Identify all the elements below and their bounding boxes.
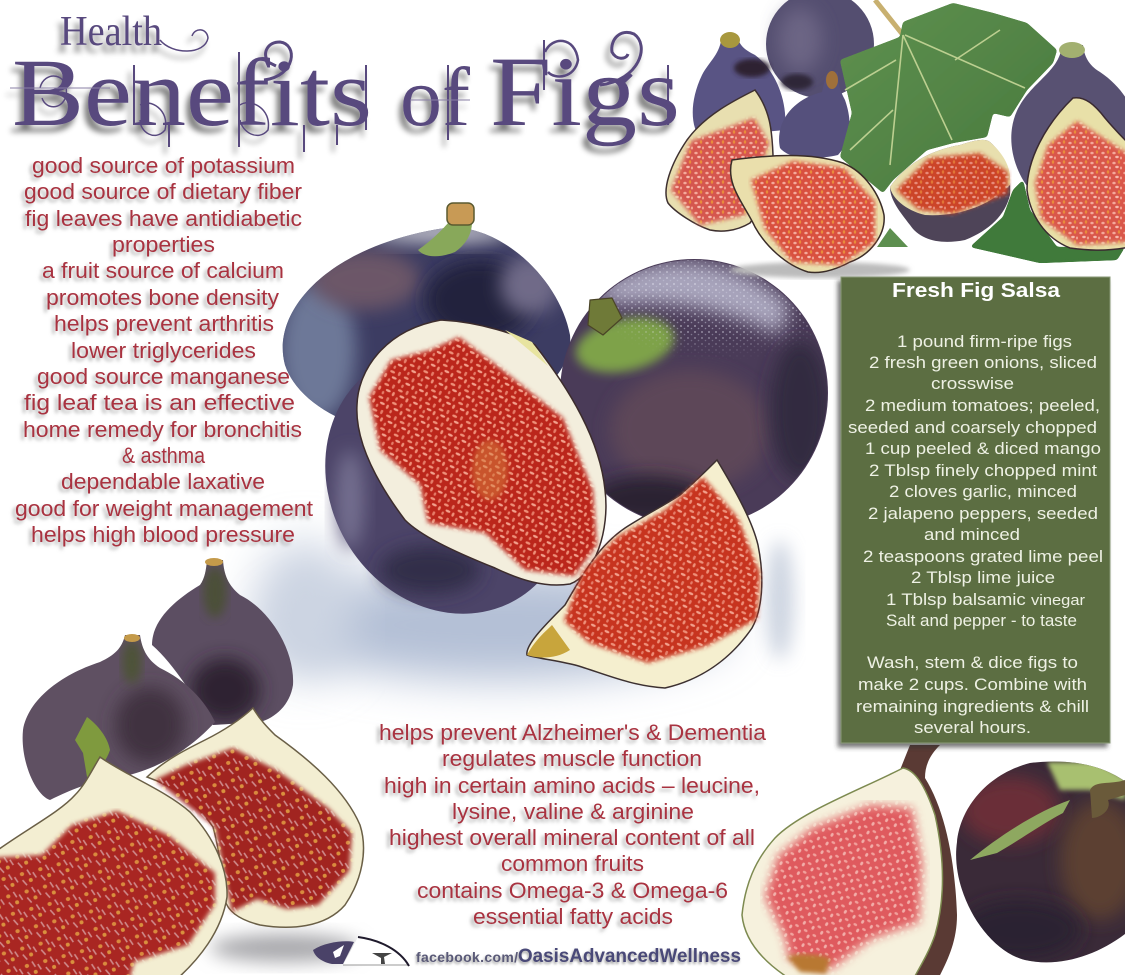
recipe ingredients: and minced <box>924 525 1020 544</box>
benefits list: left column: good source of dietary fiber <box>24 179 302 204</box>
benefits list: left column: lower triglycerides <box>71 338 256 363</box>
recipe ingredients: Salt and pepper - to taste <box>886 611 1077 630</box>
recipe ingredients: 2 teaspoons grated lime peel <box>863 547 1103 566</box>
benefits list: left column: dependable laxative <box>61 469 265 494</box>
bottom right figs group <box>742 745 1125 975</box>
fig: whole, far left <box>693 32 785 138</box>
benefits list: left column: properties <box>112 232 215 257</box>
title word: Figs: Figs <box>490 36 680 147</box>
benefits list: bottom centre: regulates muscle function <box>442 746 702 771</box>
fig: cut right <box>147 708 364 927</box>
facebook address: facebook.com/ <box>416 949 518 965</box>
recipe directions: Wash, stem & dice figs to <box>867 653 1078 672</box>
leaf: large <box>840 0 1057 193</box>
fig: whole right <box>956 761 1125 962</box>
benefits list: left column: good for weight management <box>15 496 313 521</box>
fig: cut centre <box>731 156 884 273</box>
benefits list: left column: good source of potassium <box>32 153 295 178</box>
benefits list: left column: fig leaves have antidiabetic <box>25 206 302 231</box>
recipe ingredients: 2 Tblsp finely chopped mint <box>869 461 1097 480</box>
title swashes <box>10 30 668 152</box>
shadow under main figs <box>255 540 794 680</box>
logo and facebook link <box>313 937 741 967</box>
panel: Fresh Fig Salsa recipe <box>841 277 1110 743</box>
recipe directions: several hours. <box>914 718 1031 737</box>
recipe ingredients: 1 Tblsp balsamic vinegar <box>886 590 1085 609</box>
benefits list: left column: helps prevent arthritis <box>54 311 274 336</box>
icon: Oasis logo <box>313 937 409 966</box>
recipe ingredients: seeded and coarsely chopped <box>848 418 1097 437</box>
recipe ingredients: 1 pound firm-ripe figs <box>897 332 1072 351</box>
shadow below top figs <box>730 262 910 278</box>
facebook address: OasisAdvancedWellness <box>518 946 741 967</box>
benefits list: bottom centre: essential fatty acids <box>473 904 673 929</box>
stem knob <box>1090 780 1125 818</box>
fig: whole back <box>152 558 293 725</box>
fig: cut left <box>0 717 227 975</box>
recipe ingredients: 2 cloves garlic, minced <box>889 482 1077 501</box>
benefits list: bottom centre: lysine, valine & arginine <box>452 799 694 824</box>
recipe ingredients <box>848 332 1103 630</box>
benefits list: bottom centre: high in certain amino acids – leucine, <box>384 773 760 798</box>
recipe ingredients: 2 Tblsp lime juice <box>911 568 1055 587</box>
recipe ingredients: 2 jalapeno peppers, seeded <box>868 504 1098 523</box>
recipe box <box>841 277 1110 743</box>
top right figs group <box>665 0 1125 278</box>
fig: cut small <box>890 140 1012 242</box>
stem <box>75 717 110 777</box>
recipe heading: Fresh Fig Salsa <box>892 280 1061 302</box>
leaf: lower right <box>970 180 1125 263</box>
title word: Benefits: Benefits <box>12 39 372 146</box>
bottom left figs group <box>0 558 364 975</box>
benefits list: left column: fig leaf tea is an effective <box>24 390 295 415</box>
recipe directions <box>856 653 1089 737</box>
benefits list: left column: helps high blood pressure <box>31 522 295 547</box>
title <box>10 9 680 152</box>
small leaf <box>877 228 908 247</box>
benefits list: bottom centre <box>379 720 767 929</box>
benefits list: left column: promotes bone density <box>46 285 279 310</box>
main figs group <box>278 203 835 688</box>
fig: front base behind cut <box>278 305 618 659</box>
fig: back left whole <box>280 203 570 436</box>
recipe directions: remaining ingredients & chill <box>856 697 1089 716</box>
benefits list: left column: a fruit source of calcium <box>42 258 284 283</box>
fig: wedge <box>527 460 765 688</box>
recipe ingredients: 1 cup peeled & diced mango <box>865 439 1101 458</box>
fig: whole, top centre <box>766 0 874 98</box>
benefits list: bottom centre: helps prevent Alzheimer's & Dementia <box>379 720 767 745</box>
fig: whole front <box>23 634 215 800</box>
recipe ingredients: 2 medium tomatoes; peeled, <box>865 396 1100 415</box>
subtitle: Health: Health <box>60 9 162 55</box>
fig: whole right <box>1011 42 1125 190</box>
fig: back right whole <box>555 255 835 527</box>
benefits list: left column <box>15 153 313 547</box>
benefits list: left column: & asthma <box>122 443 206 468</box>
benefits list: left column: good source manganese <box>37 364 290 389</box>
shadow below figs <box>210 934 360 962</box>
stem <box>588 298 622 335</box>
stem <box>418 222 472 256</box>
recipe ingredients: crosswise <box>931 374 1014 393</box>
recipe ingredients: 2 fresh green onions, sliced <box>869 353 1097 372</box>
fig: cut <box>742 745 957 975</box>
fig: cut half <box>357 320 606 585</box>
benefits list: bottom centre: highest overall mineral content of all <box>389 825 755 850</box>
benefits list: bottom centre: common fruits <box>501 851 644 876</box>
recipe directions: make 2 cups. Combine with <box>858 675 1087 694</box>
benefits list: bottom centre: contains Omega-3 & Omega-6 <box>417 878 728 903</box>
fig: cut right <box>1027 98 1125 250</box>
title word: of: of <box>400 51 470 144</box>
benefits list: left column: home remedy for bronchitis <box>23 417 302 442</box>
leaf stem <box>875 0 903 35</box>
fig: whole, small centre <box>779 71 850 158</box>
facebook address <box>416 946 741 967</box>
fig: cut left <box>665 90 775 231</box>
